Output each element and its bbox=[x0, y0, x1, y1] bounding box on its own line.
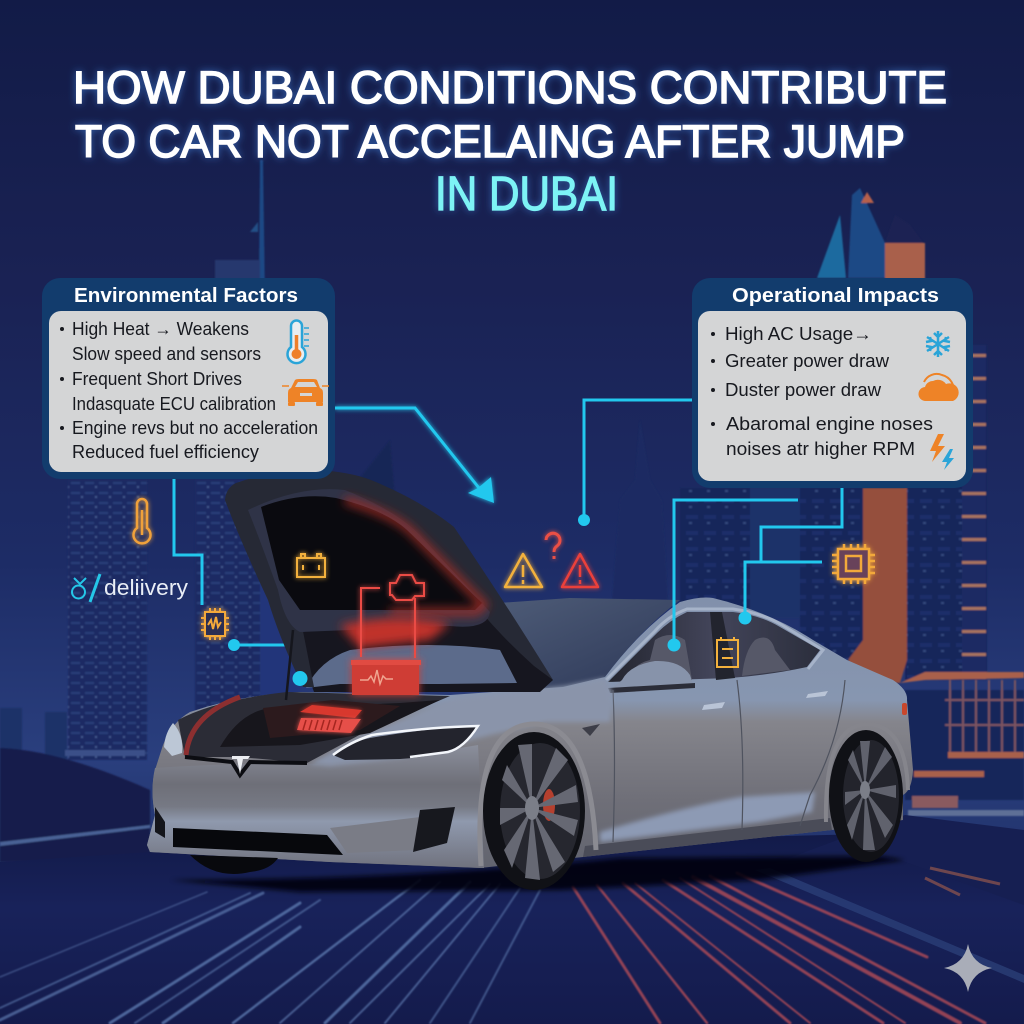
panel heading: Environmental Factors bbox=[74, 285, 298, 307]
panel list: Duster power draw bbox=[725, 380, 882, 400]
panel list: High Heat → Weakens bbox=[72, 319, 249, 339]
cyan connectors over car bbox=[669, 555, 750, 650]
panel list: Indasquate ECU calibration bbox=[72, 394, 276, 414]
panel list: High AC Usage→ bbox=[725, 324, 872, 344]
clipboard icon on window bbox=[717, 637, 738, 667]
window pillar bbox=[710, 612, 735, 680]
front tyre far side bbox=[190, 855, 278, 874]
panel list: Frequent Short Drives bbox=[72, 369, 242, 389]
front wheel bbox=[483, 732, 585, 890]
engine bay bbox=[220, 700, 440, 747]
side reflection band bbox=[600, 792, 815, 842]
icon: lightning bolts bbox=[930, 434, 954, 470]
door handles bbox=[702, 691, 828, 710]
hood inner dark panel bbox=[261, 496, 482, 610]
background: Dubai skyline bbox=[0, 160, 1024, 862]
chip icon right bbox=[832, 544, 875, 584]
battery on engine bbox=[351, 660, 421, 695]
car shadow bbox=[170, 856, 905, 892]
panel list: Greater power draw bbox=[725, 351, 890, 371]
panel: environmental factors bbox=[42, 278, 335, 479]
panel list: noises atr higher RPM bbox=[726, 439, 915, 459]
hood lining bbox=[248, 489, 490, 632]
panel list: Engine revs but no acceleration bbox=[72, 418, 318, 438]
panel heading: Operational Impacts bbox=[732, 285, 939, 307]
icon: snowflake bbox=[926, 331, 950, 357]
panel: operational impacts bbox=[692, 278, 973, 488]
icon: thermometer bbox=[287, 320, 309, 363]
arrow pointing to the car bbox=[335, 408, 494, 503]
chip icon left bbox=[201, 608, 229, 640]
door lines bbox=[613, 680, 845, 842]
connector lines bbox=[174, 400, 842, 651]
side sill bbox=[583, 818, 832, 857]
road with light trails bbox=[0, 815, 1024, 1024]
panel list bbox=[711, 324, 933, 459]
panel list bbox=[60, 319, 318, 462]
open hood bbox=[225, 470, 553, 700]
rear wheel bbox=[829, 730, 903, 862]
roof highlight bbox=[606, 609, 823, 680]
title: HOW DUBAI CONDITIONS CONTRIBUTE bbox=[73, 62, 947, 113]
icon: car bbox=[282, 379, 329, 406]
title bbox=[73, 62, 947, 167]
car bbox=[147, 598, 913, 890]
hood strut bbox=[286, 630, 293, 700]
headlight right bbox=[333, 725, 480, 760]
seats bbox=[628, 635, 790, 682]
left embankment bbox=[0, 748, 150, 862]
battery warning light bbox=[297, 554, 325, 577]
fender badge bbox=[582, 724, 600, 736]
windshield bbox=[470, 598, 680, 692]
title: location: IN DUBAI bbox=[435, 168, 618, 221]
tail light bbox=[902, 703, 907, 715]
delivery label: deliivery bbox=[104, 575, 188, 600]
left bumper vent bbox=[155, 807, 165, 838]
delivery label bbox=[72, 574, 188, 602]
grille line and logo bbox=[185, 756, 307, 775]
red glow on hood edge bbox=[345, 500, 484, 612]
panel list: Abaromal engine noses bbox=[726, 414, 933, 434]
front wheel arch bbox=[480, 724, 596, 866]
panel list: Slow speed and sensors bbox=[72, 344, 261, 364]
half cyan marker bbox=[293, 671, 308, 686]
side windows bbox=[608, 612, 820, 682]
bridge structure bbox=[900, 672, 1024, 816]
thermometer icon over skyline bbox=[134, 499, 151, 543]
fender surface bbox=[310, 678, 612, 766]
car body bbox=[147, 598, 913, 868]
lower grille bbox=[173, 828, 343, 855]
warning icons bbox=[505, 533, 598, 587]
title: TO CAR NOT ACCELAING AFTER JUMP bbox=[75, 116, 905, 167]
rear wheel arch bbox=[826, 724, 908, 822]
red hood rim bbox=[186, 697, 240, 755]
star watermark bbox=[944, 944, 992, 992]
panel list: Reduced fuel efficiency bbox=[72, 442, 259, 462]
under hood cavity bbox=[293, 610, 553, 692]
engine warning light and wires bbox=[361, 575, 424, 658]
left hood edge bbox=[178, 692, 450, 763]
bumper bbox=[147, 745, 484, 868]
firewall panel bbox=[306, 645, 517, 688]
orange tower bbox=[848, 488, 907, 683]
bumper intake bbox=[330, 817, 420, 853]
icon: cloud bbox=[918, 374, 959, 401]
side mirror bbox=[610, 661, 693, 690]
headlight left bbox=[164, 723, 182, 756]
hood outer bbox=[225, 470, 553, 687]
